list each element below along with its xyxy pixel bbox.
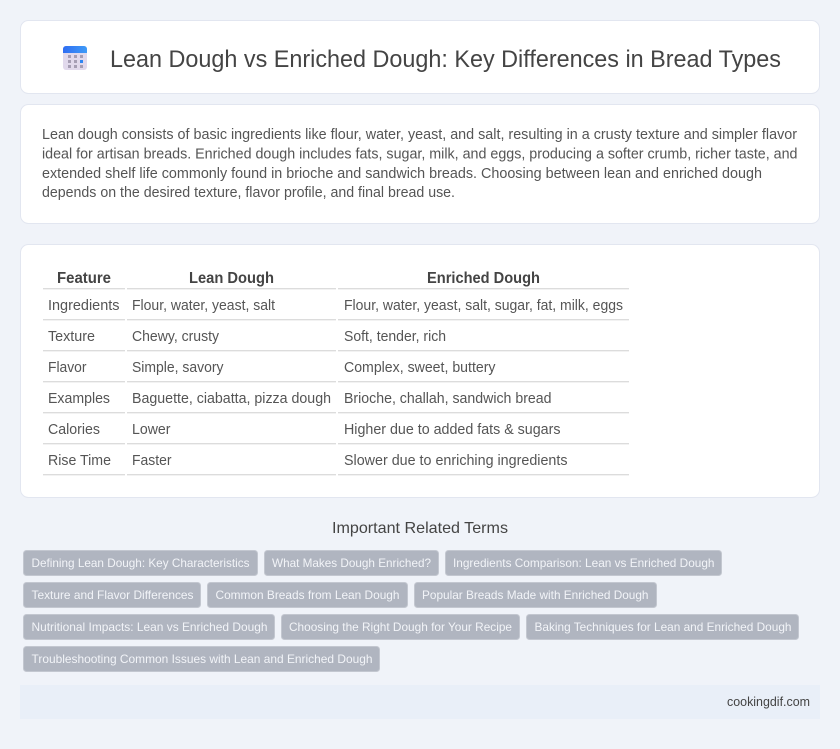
tag: Texture and Flavor Differences	[32, 588, 194, 602]
row: texture: Chewy, crusty	[132, 329, 220, 345]
text block: introduction paragraph: Lean dough consists of basic ingredients like flour, water, yeast, and salt, resulting in a crusty texture and simpler flavor	[42, 127, 797, 143]
table header row: Lean Dough	[189, 270, 274, 287]
row: texture	[48, 329, 446, 345]
tag	[414, 582, 656, 608]
tag	[24, 550, 258, 576]
tag: Choosing the Right Dough for Your Recipe	[289, 620, 512, 634]
tag	[526, 614, 798, 640]
panel: introduction	[20, 104, 820, 224]
footer: cookingdif.com	[727, 695, 810, 709]
related terms tags	[24, 550, 798, 672]
text block: introduction paragraph	[42, 127, 798, 201]
heading: important related terms: Important Related Terms	[332, 520, 508, 537]
tag: Popular Breads Made with Enriched Dough	[422, 588, 648, 602]
row: flavor: Complex, sweet, buttery	[344, 360, 496, 376]
tag	[282, 614, 520, 640]
panel: comparison table	[20, 244, 820, 498]
tag	[24, 614, 274, 640]
text block: introduction paragraph: extended shelf life commonly found in brioche and sandwich breads. Choosing between lean and enriched dough	[42, 166, 762, 182]
table header row	[57, 270, 540, 287]
table header row: Enriched Dough	[427, 270, 540, 287]
row: flavor: Simple, savory	[132, 360, 224, 376]
tag: Troubleshooting Common Issues with Lean and Enriched Dough	[32, 652, 372, 666]
row: texture: Soft, tender, rich	[344, 329, 446, 345]
tag	[24, 582, 200, 608]
tag	[208, 582, 408, 608]
tag	[446, 550, 722, 576]
row: flavor: Flavor	[48, 360, 87, 376]
row: calories: Calories	[48, 422, 100, 438]
row: examples: Baguette, ciabatta, pizza dough	[132, 391, 331, 407]
row: examples: Examples	[48, 391, 110, 407]
tag: Defining Lean Dough: Key Characteristics	[32, 556, 250, 570]
tag: Common Breads from Lean Dough	[216, 588, 400, 602]
title: Lean Dough vs Enriched Dough: Key Differences in Bread Types	[110, 46, 781, 73]
tag: Nutritional Impacts: Lean vs Enriched Dough	[32, 620, 268, 634]
panel: header	[20, 20, 820, 94]
row: examples: Brioche, challah, sandwich bread	[344, 391, 552, 407]
text block: introduction paragraph: depends on the desired texture, flavor profile, and final bread use.	[42, 185, 455, 201]
footer	[20, 685, 820, 719]
row: rise time	[48, 453, 568, 469]
row: ingredients: Flour, water, yeast, salt	[132, 298, 275, 314]
row: rise time: Slower due to enriching ingredients	[344, 453, 568, 469]
row: ingredients: Flour, water, yeast, salt, sugar, fat, milk, eggs	[344, 298, 623, 314]
tag	[24, 646, 380, 672]
tag: Ingredients Comparison: Lean vs Enriched Dough	[453, 556, 714, 570]
text block: introduction paragraph: ideal for artisan breads. Enriched dough includes fats, sugar, milk, and eggs, producing a softer crumb, richer taste, and	[42, 146, 798, 162]
row: ingredients	[48, 298, 623, 314]
tag: Baking Techniques for Lean and Enriched Dough	[534, 620, 792, 634]
row: calories	[48, 422, 560, 438]
row: rise time: Rise Time	[48, 453, 111, 469]
row: examples	[48, 391, 552, 407]
row: flavor	[48, 360, 496, 376]
row: calories: Lower	[132, 422, 171, 438]
row: ingredients: Ingredients	[48, 298, 120, 314]
row: calories: Higher due to added fats & sugars	[344, 422, 560, 438]
tag: What Makes Dough Enriched?	[272, 556, 431, 570]
row: rise time: Faster	[132, 453, 172, 469]
table header row: Feature	[57, 270, 111, 287]
tag	[264, 550, 438, 576]
icon: calendar	[63, 46, 87, 70]
row: texture: Texture	[48, 329, 95, 345]
